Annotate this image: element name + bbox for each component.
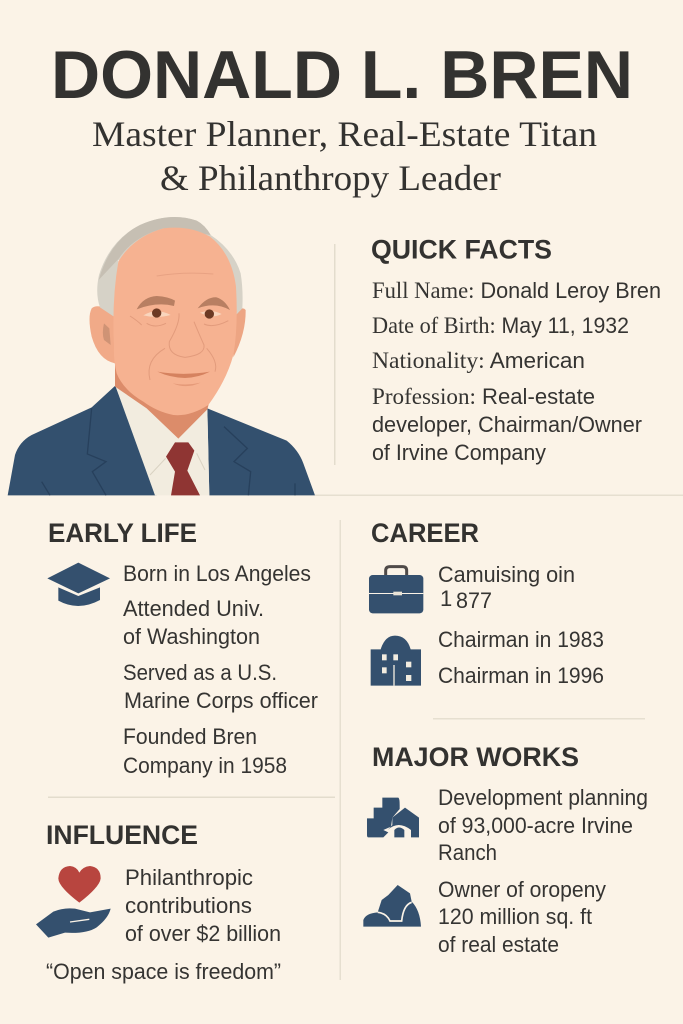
early life text: Marine Corps officer bbox=[124, 688, 318, 713]
quick facts text: developer, Chairman/Owner bbox=[372, 412, 642, 437]
icon: graduation cap bbox=[47, 563, 110, 606]
hair bbox=[97, 217, 243, 317]
shirt bbox=[115, 386, 209, 495]
heading: major works: MAJOR WORKS bbox=[372, 742, 579, 772]
tie bbox=[166, 442, 200, 495]
panel: influence bbox=[36, 820, 281, 984]
panel: quick facts bbox=[371, 234, 661, 465]
career text: 877 bbox=[456, 588, 492, 613]
title: DONALD L. BREN bbox=[51, 37, 633, 113]
subtitle bbox=[92, 114, 597, 198]
major works text: of 93,000-acre Irvine bbox=[438, 813, 633, 838]
quick facts text: Full Name: Donald Leroy Bren bbox=[372, 278, 661, 303]
icon: building bbox=[371, 636, 421, 686]
eyebrows bbox=[137, 296, 230, 310]
lapel lines bbox=[42, 408, 295, 495]
career text: Camuising oin bbox=[438, 562, 575, 587]
major works text: 120 million sq. ft bbox=[438, 904, 592, 929]
subtitle: & Philanthropy Leader bbox=[160, 158, 501, 198]
early life text: Served as a U.S. bbox=[123, 660, 277, 685]
right ear bbox=[233, 308, 246, 357]
subtitle: Master Planner, Real-Estate Titan bbox=[92, 114, 597, 154]
early life text: Born in Los Angeles bbox=[123, 561, 311, 586]
major works text: of real estate bbox=[438, 932, 559, 957]
mouth bbox=[157, 372, 210, 378]
major works text: Owner of oropeny bbox=[438, 877, 606, 902]
icon: briefcase bbox=[369, 567, 423, 613]
heading: influence: INFLUENCE bbox=[46, 820, 198, 850]
early life text: Founded Bren bbox=[123, 724, 257, 749]
panel: early life bbox=[47, 518, 318, 778]
quick facts text: of Irvine Company bbox=[372, 440, 546, 465]
eyes bbox=[143, 311, 222, 317]
influence text: Philanthropic bbox=[125, 865, 253, 890]
icon: mountain bbox=[363, 885, 421, 927]
major works text: Development planning bbox=[438, 785, 648, 810]
icon: development bbox=[367, 798, 419, 837]
major works text: Ranch bbox=[438, 840, 497, 865]
quick facts text: Profession: Real-estate bbox=[372, 384, 595, 409]
influence text: of over $2 billion bbox=[125, 921, 281, 946]
left ear bbox=[89, 306, 115, 363]
career text bbox=[438, 562, 604, 688]
heading: quick facts: QUICK FACTS bbox=[371, 234, 552, 264]
neck bbox=[115, 357, 213, 439]
panel: career bbox=[369, 518, 604, 688]
early life text bbox=[123, 561, 318, 778]
career text: 1 bbox=[440, 586, 452, 611]
quick facts text bbox=[372, 278, 661, 465]
career text: Chairman in 1983 bbox=[438, 627, 604, 652]
quick facts text: Date of Birth: May 11, 1932 bbox=[372, 313, 629, 338]
quick facts text: Nationality: American bbox=[372, 348, 585, 373]
major works text bbox=[438, 785, 648, 957]
icon: heart in hand bbox=[36, 866, 111, 938]
face lines bbox=[130, 313, 228, 380]
influence text: contributions bbox=[125, 893, 252, 918]
head bbox=[113, 228, 237, 415]
heading: early life: EARLY LIFE bbox=[48, 518, 197, 548]
influence text bbox=[125, 865, 281, 946]
early life text: Company in 1958 bbox=[123, 753, 287, 778]
portrait bbox=[8, 217, 315, 495]
panel: major works bbox=[363, 742, 648, 957]
quote: “Open space is freedom” bbox=[46, 959, 281, 984]
heading: career: CAREER bbox=[371, 518, 479, 548]
early life text: of Washington bbox=[123, 624, 260, 649]
suit jacket bbox=[8, 386, 315, 495]
facial features bbox=[130, 296, 230, 386]
career text: Chairman in 1996 bbox=[438, 663, 604, 688]
early life text: Attended Univ. bbox=[123, 596, 264, 621]
